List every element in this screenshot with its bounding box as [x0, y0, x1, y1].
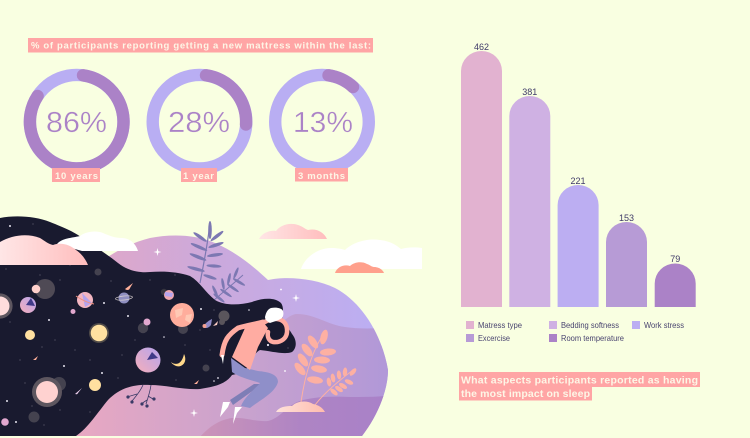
bar: 381 [509, 87, 550, 307]
shoes [220, 402, 230, 417]
donut: 28% over 1 year: 1 year [183, 171, 214, 182]
donut: 86% over 10 years: 86% [46, 107, 107, 139]
cloud: white right [301, 239, 422, 269]
stars in hair [6, 225, 269, 423]
bar: 153: 153 [619, 213, 634, 223]
bar: 79: 79 [670, 254, 680, 264]
hair: dark starry hair [0, 216, 296, 436]
lower hill [201, 396, 384, 436]
arm: over head [263, 319, 287, 342]
bar: 221 [558, 176, 599, 307]
chart caption: the most impact on sleep [461, 388, 590, 400]
legend: Bedding softness [561, 320, 619, 330]
donut: 28% over 1 year: 28% [168, 107, 230, 139]
legend [466, 320, 684, 343]
background hill blob [70, 235, 388, 436]
cloud: pink left [0, 235, 88, 265]
woman [220, 308, 287, 424]
illustration: sleeper with cosmic hair [0, 216, 422, 438]
donut: 86% over 10 years: 10 years [55, 171, 98, 182]
faint stars in hair [6, 224, 288, 426]
head hair [268, 322, 286, 342]
sparkles [154, 248, 300, 417]
legend: Excercise [478, 333, 510, 343]
arm: left [222, 322, 263, 355]
legend: Work stress [644, 320, 684, 330]
bar: 381: 381 [522, 87, 537, 97]
middle hill [123, 314, 388, 436]
fern: large purple leaves [187, 221, 246, 303]
legend: Room temperature [561, 333, 624, 343]
plant: coral leaves [292, 329, 358, 405]
legend: Matress type [478, 320, 522, 330]
donut: 28% over 1 year [153, 75, 246, 182]
bar chart [461, 42, 696, 307]
cloud: salmon [335, 262, 384, 273]
chart caption: What aspects participants reported as having [461, 374, 698, 386]
chart caption [459, 372, 700, 400]
bar: 79 [655, 254, 696, 307]
bar: 462 [461, 42, 502, 307]
torso [232, 322, 268, 370]
cloud: white behind hair [57, 232, 138, 251]
twig with berries [127, 385, 155, 407]
cloud: pink top [259, 224, 327, 239]
bar: 153 [606, 213, 647, 307]
bar: 221: 221 [570, 176, 586, 186]
bar: 462: 462 [474, 42, 489, 52]
head wrap [265, 308, 283, 323]
donut: 86% over 10 years [30, 75, 124, 182]
donut: 13% over 3 months: 3 months [298, 171, 345, 182]
title: % of participants reporting getting a new mattress within the last: [31, 40, 371, 52]
planets and moons [0, 268, 230, 426]
leg: back [230, 384, 262, 405]
donut: 13% over 3 months [275, 75, 369, 182]
leg: front [231, 358, 278, 408]
donut: 13% over 3 months: 13% [293, 107, 353, 139]
mound [276, 402, 325, 412]
